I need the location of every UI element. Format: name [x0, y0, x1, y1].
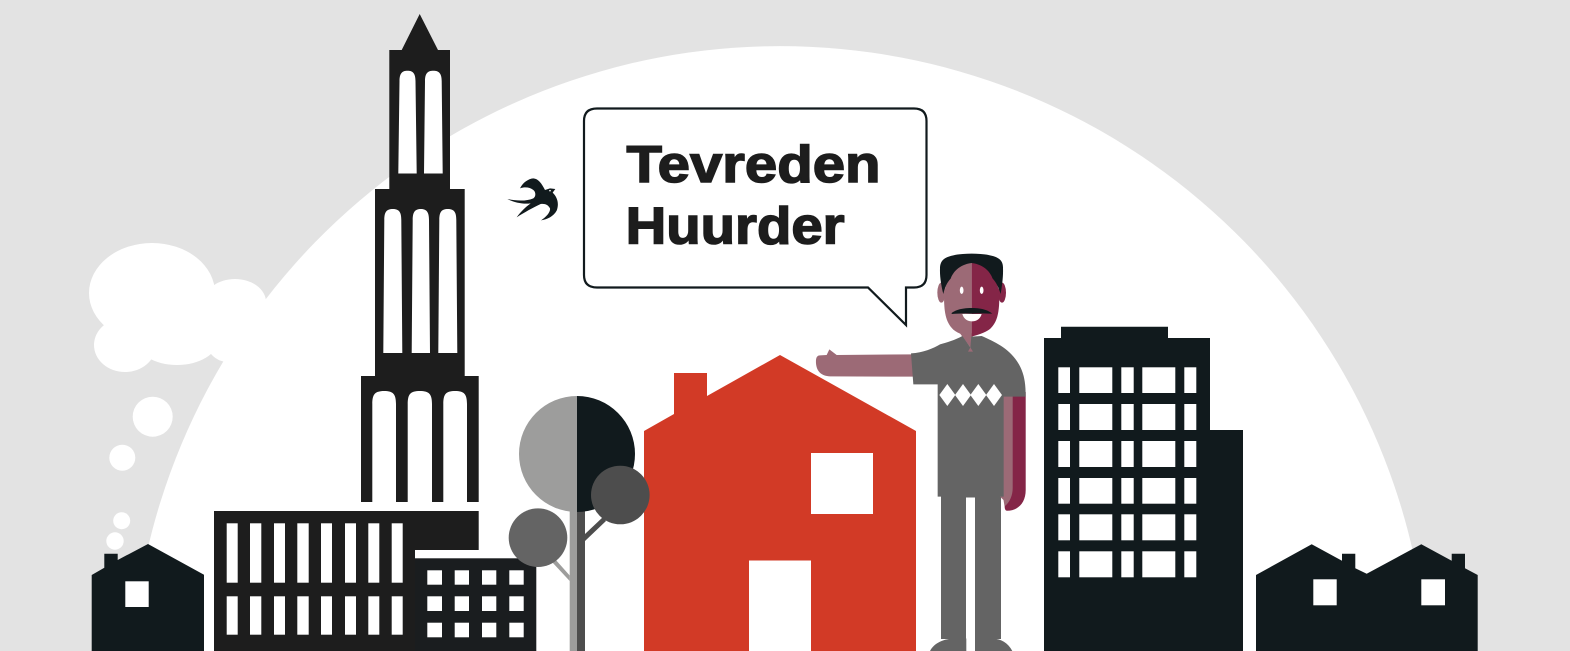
head	[937, 254, 1006, 336]
church tower	[361, 14, 479, 502]
house window	[811, 453, 873, 514]
low office building	[214, 511, 479, 651]
bubble heading	[626, 136, 880, 256]
shirt diamonds	[939, 384, 1002, 406]
speech bubble	[584, 108, 926, 325]
hair	[940, 254, 1003, 294]
moustache	[952, 308, 992, 314]
bubble heading: Huurder	[626, 198, 845, 256]
smile	[962, 314, 982, 321]
row of two houses right	[1256, 544, 1478, 651]
lowered arm	[999, 392, 1026, 511]
white sky dome	[132, 46, 1428, 651]
red house	[644, 355, 916, 651]
tall apartment building	[1044, 327, 1243, 651]
house door	[749, 560, 811, 651]
smoke cloud and puffs	[89, 243, 266, 550]
neck	[960, 333, 973, 347]
collar	[968, 347, 973, 352]
shirt	[911, 336, 1026, 497]
tree	[509, 396, 650, 651]
small house left	[92, 544, 204, 651]
tenant figure	[816, 254, 1026, 651]
outstretched arm	[816, 349, 913, 377]
legs	[930, 490, 1012, 651]
icon: swallow bird	[507, 178, 558, 220]
bubble heading: Tevreden	[626, 136, 880, 194]
eyes	[960, 287, 983, 294]
small block with square windows	[415, 558, 536, 651]
